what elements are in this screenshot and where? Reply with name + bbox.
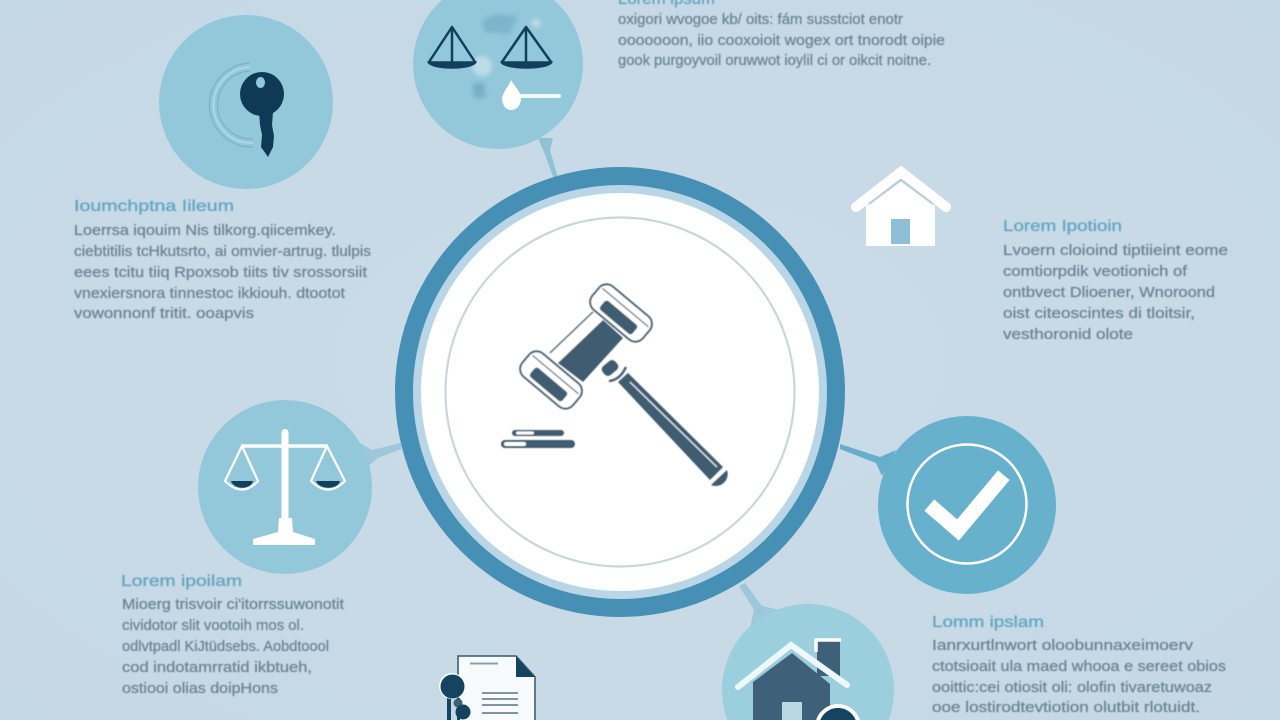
text block: right: Lvoern cloioind tiptiieint eome	[1003, 243, 1228, 259]
text block: right: vesthoronid olote	[1003, 327, 1133, 343]
panel: top scales circle	[413, 0, 583, 149]
connector: left scales circle to hub	[355, 440, 401, 470]
heading: right: Lorem Ipotioin	[1003, 218, 1122, 235]
text block: bottom left: odlvtpadl KiJtüdsebs. Aobdtoool	[122, 639, 329, 655]
text block: left: vowonnonf tritit. ooapvis	[74, 306, 254, 322]
heading: left: Ioumchptna Iileum	[74, 198, 234, 215]
text block: bottom right: ooe lostirodtevtiotion olutbit rlotuidt.	[932, 700, 1200, 716]
panel: key circle	[159, 15, 333, 189]
text block: bottom right: Ianrxurtlnwort oloobunnaxeimoerv	[932, 638, 1194, 654]
text block: left: Loerrsa iqouim Nis tilkorg.qiicemkey.	[74, 223, 336, 239]
connector: top circle to hub	[538, 138, 558, 179]
icon: gavel	[501, 280, 728, 486]
text block: bottom left: cod indotamrratid ikbtueh,	[122, 660, 312, 676]
connector: check circle to hub	[840, 444, 896, 476]
icon: check mark	[908, 444, 1026, 564]
icon: dark house	[738, 640, 860, 720]
icon: document with seal	[439, 656, 535, 720]
panel: left scales circle	[198, 400, 372, 574]
text block: top: oxigori wvogoe kb/ oits: fám susstciot enotr	[618, 12, 903, 28]
text block: left: ciebtitilis tcHkutsrto, ai omvier-artrug. tlulpis	[74, 244, 371, 260]
text block: top: ooooooon, iio cooxoioit wogex ort tnorodt oipie	[618, 33, 945, 49]
icon: plain white house	[856, 172, 946, 246]
text block: right: oist citeoscintes di tloitsir,	[1003, 306, 1195, 322]
text block: bottom left	[121, 573, 344, 697]
icon: blurred fragments	[472, 14, 540, 98]
text block: right: comtiorpdik veotionich of	[1003, 264, 1188, 280]
text block: left	[74, 198, 371, 322]
text block: top: gook purgoyvoil oruwwot ioylil ci or oikcit noitne.	[618, 53, 931, 69]
icon: balance scale	[225, 429, 345, 545]
text block: left: eees tcitu tiiq Rpoxsob tiits tiv srossorsiit	[74, 265, 367, 281]
text block: bottom right: ctotsioait ula maed whooa e sereet obios	[932, 659, 1226, 675]
connector: house circle to hub	[739, 583, 780, 628]
icon: key	[209, 63, 284, 157]
heading: bottom left: Lorem ipoilam	[121, 573, 242, 590]
panel: house circle	[722, 604, 894, 720]
text block: right	[1003, 218, 1228, 343]
text block: bottom left: cividotor slit vootoih mos ol.	[122, 618, 304, 634]
heading: bottom right: Lomm ipslam	[932, 614, 1044, 631]
icon: right balance pan	[501, 27, 552, 68]
text block: right: ontbvect Dlioener, Wnoroond	[1003, 285, 1215, 301]
text block: top	[618, 0, 945, 69]
panel: check circle	[878, 416, 1056, 594]
text block: bottom left: ostiooi olias doipHons	[122, 681, 278, 697]
text block: bottom right: ooittic:cei otiosit oli: olofin tivaretuwoaz	[932, 680, 1212, 696]
text block: bottom right	[932, 614, 1226, 716]
icon: left balance pan	[428, 27, 476, 68]
central hub circle	[395, 167, 845, 617]
icon: white drop and bar	[502, 80, 561, 110]
text block: bottom left: Mioerg trisvoir ci'itorrssuwonotit	[122, 597, 344, 613]
text block: left: vnexiersnora tinnestoc ikkiouh. dtootot	[74, 286, 345, 302]
